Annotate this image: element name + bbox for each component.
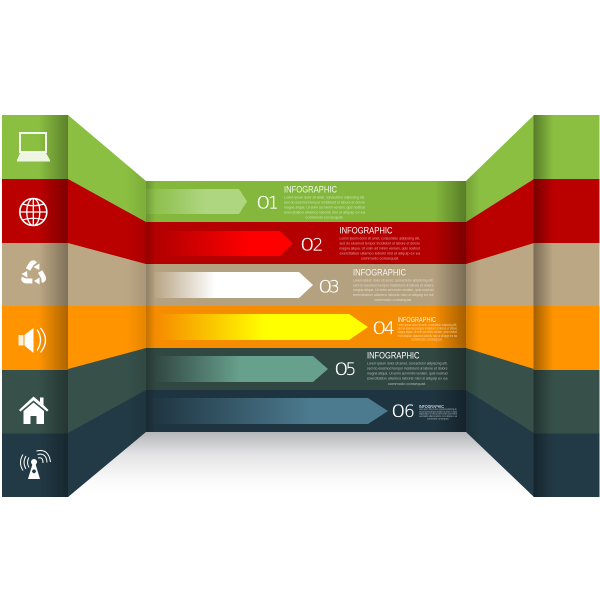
arrow 1 [145,189,247,214]
panel: right column [534,115,600,497]
text block 1: commodo consequat. [305,214,344,219]
text block 2: Lorem ipsum dolor sit amet, consectetur adipiscing elit, [340,236,420,240]
number 04: 0 [372,318,387,338]
text block 2: commodo consequat. [361,255,399,260]
text block 3: exercitation ullamco laboris nisi ut aliquip ex ea [353,292,434,297]
text block 1: Lorem ipsum dolor sit amet, consectetur adipiscing elit, [284,194,365,200]
number 03: 3 [329,278,340,298]
number 05 [334,359,356,380]
text block 1: exercitation ullamco laboris nisi ut aliquip ex ea [284,209,366,214]
number 01 [256,193,279,214]
panel: right wing [466,115,534,497]
arrow 3 [150,272,313,298]
text block 1: magna aliqua. Ut enim ad minim veniam, quis nostrud [284,204,365,209]
number 02: 2 [312,236,323,256]
arrow 5 [155,356,328,382]
number 04 [372,318,395,339]
text block 5: Lorem ipsum dolor sit amet, consectetur adipiscing elit, [367,360,448,366]
text block 1 [284,184,366,219]
number 02: 0 [300,235,315,255]
text block 6: sed do eiusmod tempor incididunt ut labore et dolore [419,410,458,413]
panel: left wing [68,115,146,497]
text block 6 [419,404,458,420]
text block 4: INFOGRAPHIC [398,317,436,324]
text block 5: commodo consequat. [388,381,426,386]
text block 2 [340,226,421,260]
text block 2: exercitation ullamco laboris nisi ut aliquip ex ea [340,250,421,255]
text block 4: exercitation ullamco laboris nisi ut aliquip ex ea [398,334,457,338]
number 04: 4 [384,319,395,339]
text block 4 [398,317,457,342]
panel: left icon column [2,115,68,497]
text block 3: commodo consequat. [374,297,412,302]
number 01: 1 [268,194,279,214]
number 01: 0 [256,193,271,213]
icon: house [19,396,48,424]
text block 1: sed do eiusmod tempor incididunt ut labore et dolore [284,199,366,204]
panel: centre bands [146,181,466,432]
text block 6: Lorem ipsum dolor sit amet, consectetur adipiscing elit, [419,408,457,411]
number 05: 0 [334,359,349,379]
icon: laptop [17,133,50,162]
floor shadow [68,432,534,497]
text block 6: INFOGRAPHIC [419,404,444,410]
text block 3: sed do eiusmod tempor incididunt ut labore et dolore [353,282,434,287]
text block 4: commodo consequat. [411,338,443,342]
arrow 2 [155,231,293,256]
text block 6: magna aliqua. Ut enim ad minim veniam, quis nostrud [419,413,457,416]
text block 3: INFOGRAPHIC [353,268,406,278]
text block 3: magna aliqua. Ut enim ad minim veniam, quis nostrud [353,287,434,292]
icon: globe [20,198,47,226]
number 05: 5 [346,360,356,380]
text block 3: Lorem ipsum dolor sit amet, consectetur adipiscing elit, [353,278,434,282]
text block 4: sed do eiusmod tempor incididunt ut labore et dolore [398,326,457,330]
text block 4: magna aliqua. Ut enim ad minim veniam, quis nostrud [398,330,457,334]
number 03: 0 [318,277,333,297]
number 06: 0 [391,401,406,421]
text block 4: Lorem ipsum dolor sit amet, consectetur adipiscing elit, [398,323,457,327]
text block 5: INFOGRAPHIC [367,350,420,362]
text block 6: exercitation ullamco laboris nisi ut aliquip ex ea [419,415,458,418]
text block 5 [367,350,448,386]
number 06: 6 [404,402,415,422]
text block 5: exercitation ullamco laboris nisi ut aliquip ex ea [367,376,448,380]
icon: recycle [21,263,46,285]
text block 2: sed do eiusmod tempor incididunt ut labore et dolore [340,240,421,245]
text block 5: magna aliqua. Ut enim ad minim veniam, quis nostrud [367,370,448,375]
text block 1: INFOGRAPHIC [284,184,337,196]
icon: signal tower [20,450,50,479]
arrow 6 [150,398,388,424]
text block 3 [353,268,434,302]
text block 6: commodo consequat. [427,417,449,420]
number 03 [318,277,340,298]
arrow 4 [155,314,368,340]
icon: speaker [18,328,46,353]
number 02 [300,235,323,256]
text block 2: INFOGRAPHIC [340,226,393,236]
text block 5: sed do eiusmod tempor incididunt ut labore et dolore [367,365,448,370]
number 06 [391,401,415,422]
text block 2: magna aliqua. Ut enim ad minim veniam, quis nostrud [340,245,420,250]
